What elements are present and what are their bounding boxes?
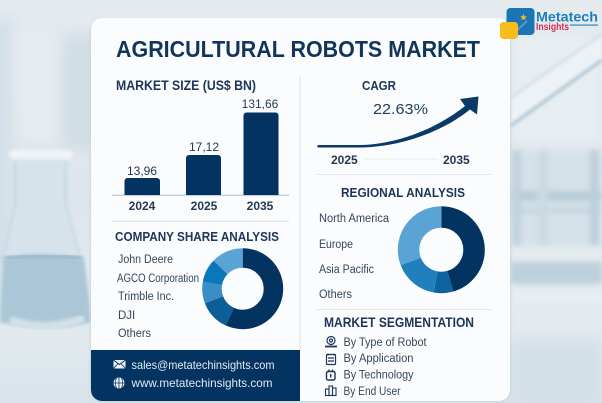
company list: AGCO Corporation [117,273,199,285]
company list: John Deere [118,254,173,266]
axis labels: 2025 [331,153,358,167]
title: AGRICULTURAL ROBOTS MARKET [116,36,481,62]
company list [117,254,199,340]
heading: CAGR: CAGR [362,78,397,93]
icon: globe [114,378,124,388]
glass rods [510,34,602,126]
segment list: By Type of Robot [344,337,427,349]
company list: Others [118,328,151,340]
footer: contact bar [91,350,300,401]
heading: regional analysis: REGIONAL ANALYSIS [341,185,465,200]
icon: robot [325,336,337,346]
logo: Metatech Insights: Insights [536,22,569,33]
region list: North America [319,213,390,225]
segment list: By Technology [344,370,414,382]
panel: company share [115,229,279,340]
panel: CAGR [318,78,478,167]
test tube rack [510,150,602,304]
email: sales@metatechinsights.com [132,358,274,372]
bar chart [112,97,289,213]
main panel [90,18,511,402]
region list: Others [319,289,352,301]
panel: market segmentation [324,315,474,398]
bar chart: 2035 [247,199,274,213]
donut chart: company share [212,258,273,319]
heading: company share: COMPANY SHARE ANALYSIS [115,229,279,244]
region list [319,213,390,301]
logo: Metatech Insights [500,8,598,39]
axis labels: 2035 [443,153,470,167]
bar chart: 2025 [191,199,218,213]
bar chart: 13,96 [127,164,157,178]
company list: DJI [118,310,135,322]
heading: market segmentation: MARKET SEGMENTATION [324,315,474,330]
segment list: By End User [344,386,401,398]
bar chart: 131,66 [242,97,279,111]
heading: market size: MARKET SIZE (US$ BN) [116,78,256,93]
logo: Metatech Insights: Metatech [536,10,598,24]
company list: Trimble Inc. [118,291,174,303]
icon: technology [326,370,335,380]
panel: market size [112,78,289,213]
segment list: By Application [344,353,414,365]
axis labels [331,153,470,167]
arrow: growth curve [318,96,478,148]
segment list [344,337,427,398]
bar chart: 17,12 [189,140,219,154]
region list: Europe [319,239,353,251]
bar chart: 2024 [129,199,156,213]
icon: mail [114,360,126,368]
donut chart: regional share [409,217,474,282]
value: CAGR: 22.63% [373,101,428,118]
panel: regional analysis [319,185,474,301]
website: www.metatechinsights.com [131,376,272,390]
icon: end user [326,386,336,396]
region list: Asia Pacific [319,264,374,276]
flask [0,150,92,328]
icon: application [326,354,336,364]
